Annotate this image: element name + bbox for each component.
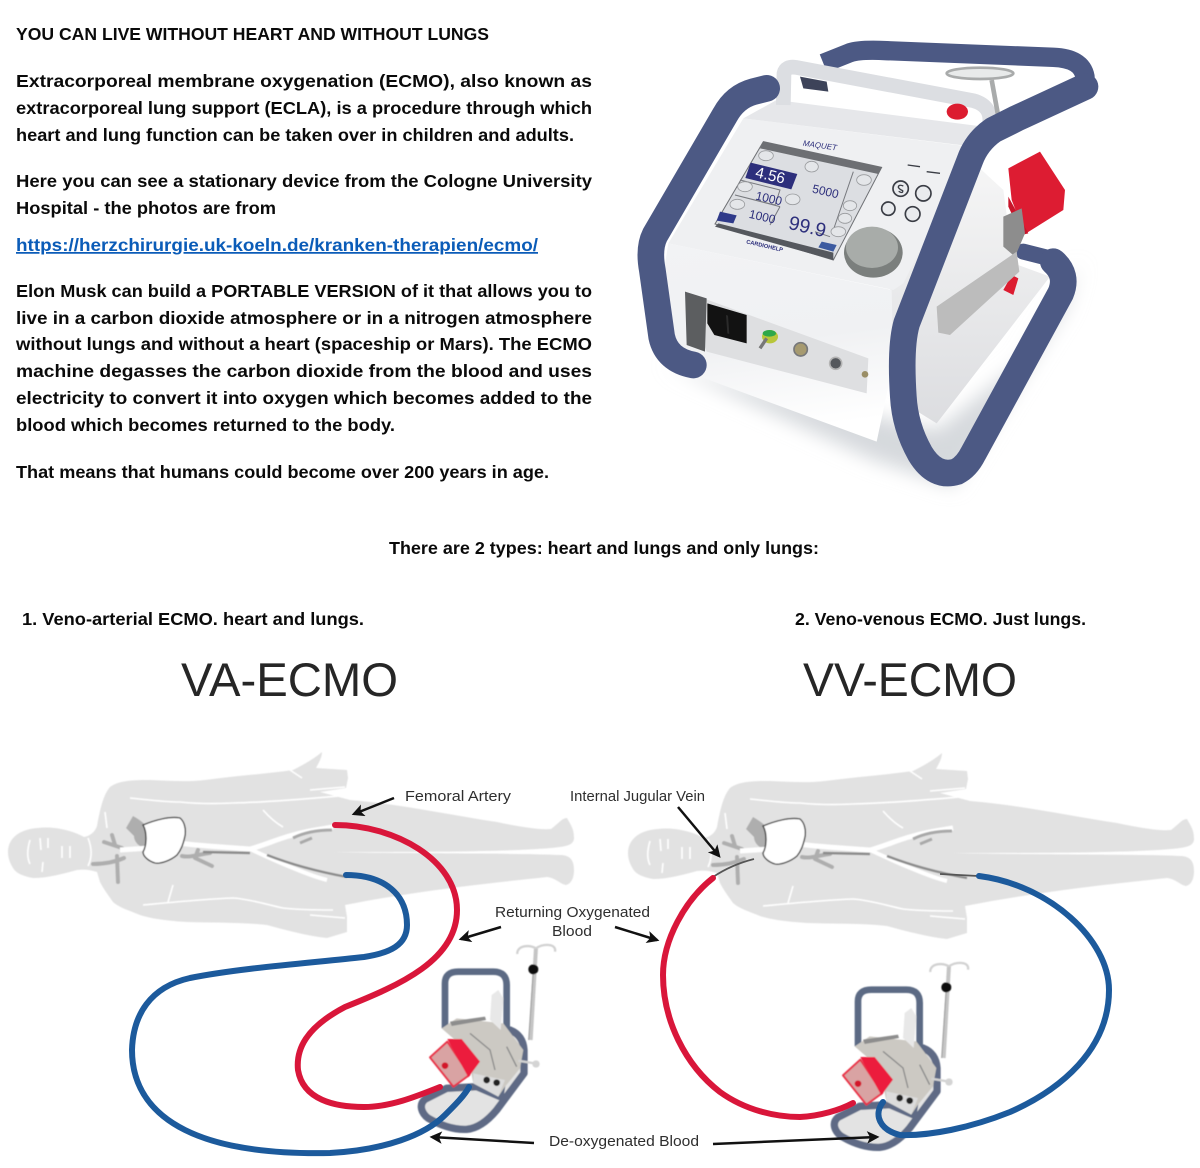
label: internal jugular vein: Internal Jugular Vein — [570, 788, 705, 805]
label: type 1: 1. Veno-arterial ECMO. heart and lungs. — [22, 609, 364, 629]
title: VV-ECMO: VV-ECMO — [803, 653, 1017, 706]
screen readouts: 1000 — [754, 189, 784, 208]
red knob — [947, 104, 968, 120]
label: returning oxygenated blood: Blood — [552, 923, 592, 940]
arrow: de-oxygenated, left — [432, 1137, 534, 1143]
arrow: de-oxygenated, right — [713, 1137, 877, 1144]
heading: YOU CAN LIVE WITHOUT HEART AND WITHOUT LUNGS — [16, 24, 489, 44]
text block: device source: Hospital - the photos are from — [16, 198, 276, 218]
text block: portable version — [15, 281, 592, 435]
screen readouts — [748, 164, 840, 242]
text block: device source: Here you can see a stationary device from the Cologne University — [16, 171, 592, 191]
arrow: femoral artery — [354, 798, 394, 814]
lower front panel — [657, 243, 893, 442]
lower back frame — [1023, 252, 1067, 300]
text block: conclusion: That means that humans could become over 200 years in age. — [16, 462, 549, 482]
text block: ECMO definition: Extracorporeal membrane oxygenation (ECMO), also known as — [16, 71, 592, 91]
control knob — [844, 227, 903, 278]
glass top — [947, 68, 1013, 117]
label: femoral artery: Femoral Artery — [405, 788, 512, 805]
text block: device source — [16, 171, 592, 218]
text block: portable version: live in a carbon dioxide atmosphere or in a nitrogen atmosphere — [16, 308, 592, 328]
top surface — [743, 100, 983, 147]
upper front panel — [668, 118, 970, 290]
text block: portable version: Elon Musk can build a PORTABLE VERSION of it that allows you to — [16, 281, 592, 301]
blue drainage tube — [132, 875, 469, 1153]
red return tube — [663, 878, 853, 1117]
left frame — [651, 88, 767, 365]
arrow: returning blood, right — [615, 927, 657, 940]
text block: ECMO definition — [16, 71, 592, 145]
screen readouts: 4.56 — [754, 164, 787, 188]
red return tube — [298, 825, 457, 1107]
label: returning oxygenated blood — [495, 904, 650, 940]
device side — [887, 150, 1050, 423]
logo text: MAQUET — [802, 139, 839, 153]
parts behind handle — [800, 77, 828, 92]
title: VA-ECMO: VA-ECMO — [181, 653, 398, 706]
arrow: returning blood, left — [461, 927, 501, 939]
carry handle — [783, 67, 990, 137]
gray bracket — [937, 252, 1019, 335]
right frame — [902, 87, 1085, 473]
connector panel — [685, 292, 868, 393]
body silhouette — [628, 753, 1194, 939]
screen readouts: 99.9 — [787, 213, 828, 242]
screen — [715, 142, 882, 260]
source link: https://herzchirurgie.uk-koeln.de/kranken-therapien/ecmo/ — [16, 235, 538, 255]
text block: portable version: without lungs and without a heart (spaceship or Mars). The ECMO — [15, 334, 592, 354]
back frame — [823, 50, 1085, 112]
text block: ECMO definition: extracorporeal lung support (ECLA), is a procedure through which — [16, 98, 592, 118]
model text: CARDIOHELP — [746, 239, 784, 254]
text block: portable version: electricity to convert it into oxygen which becomes added to the — [16, 388, 592, 408]
diagram: VV-ECMO — [628, 753, 1194, 1147]
text block: portable version: blood which becomes returned to the body. — [16, 415, 395, 435]
control buttons — [882, 165, 940, 221]
ECMO pump — [834, 963, 968, 1147]
blue drainage tube — [878, 876, 1109, 1135]
screen readouts: 5000 — [811, 182, 840, 201]
floor shadow — [663, 263, 1080, 487]
label: type 2: 2. Veno-venous ECMO. Just lungs. — [795, 609, 1086, 629]
text block: portable version: machine degasses the carbon dioxide from the blood and uses — [16, 361, 592, 381]
photo: ECMO device — [651, 50, 1085, 487]
ECMO pump — [421, 945, 555, 1129]
red pump head — [1003, 152, 1065, 295]
text block: ECMO definition: heart and lung function can be taken over in children and adults. — [16, 125, 574, 145]
screen readouts: 1000 — [748, 207, 777, 227]
label: returning oxygenated blood: Returning Oxygenated — [495, 904, 650, 921]
clamp — [1003, 208, 1025, 257]
diagram: VA-ECMO — [8, 752, 574, 1153]
section heading: two types: There are 2 types: heart and lungs and only lungs: — [389, 538, 819, 558]
body silhouette — [8, 752, 574, 938]
label: de-oxygenated blood: De-oxygenated Blood — [549, 1133, 699, 1150]
arrow: jugular vein — [678, 807, 719, 856]
